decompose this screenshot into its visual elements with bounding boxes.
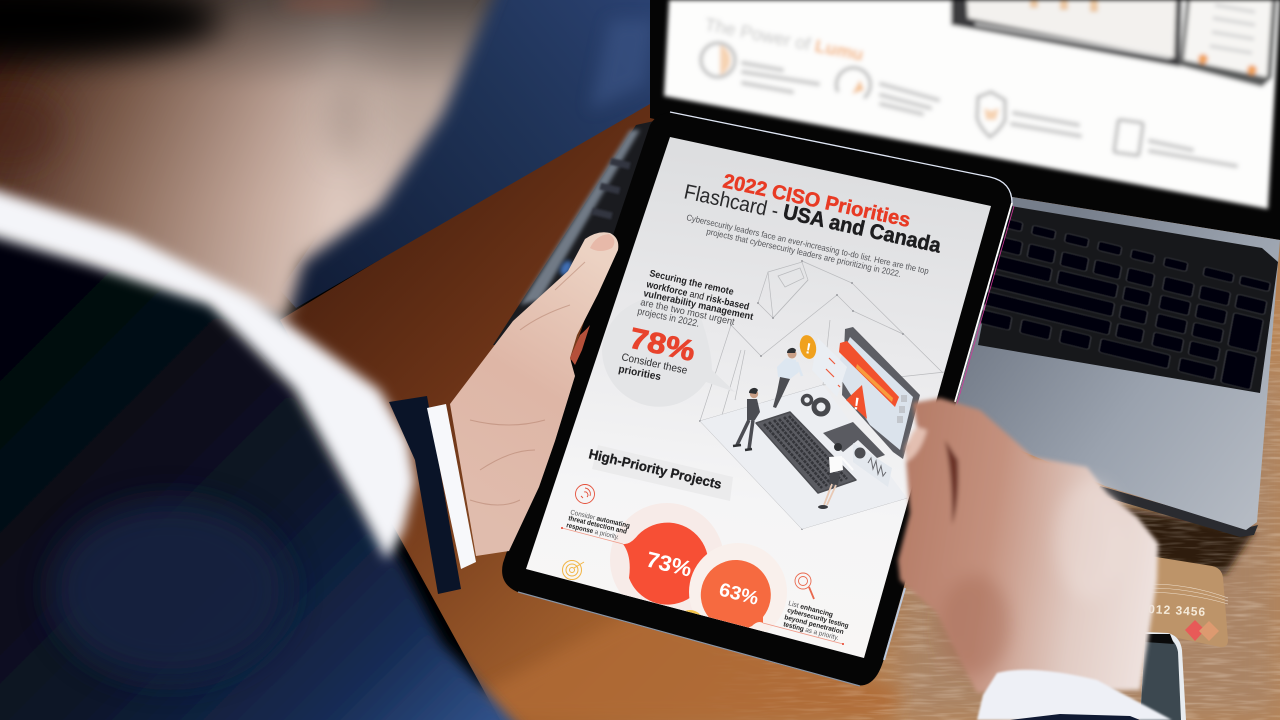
wireframe room behind illustration bbox=[700, 261, 945, 529]
grey bubble behind 78% bbox=[604, 358, 734, 406]
key finding paragraph: are the two most urgent bbox=[639, 297, 736, 328]
key finding paragraph: Securing the remote bbox=[648, 268, 735, 298]
automating text and leader line: threat detection and bbox=[568, 515, 628, 536]
icon: warning triangle bbox=[846, 385, 867, 419]
wooden table background bbox=[280, 90, 1280, 720]
isometric security illustration bbox=[733, 327, 920, 509]
infographic content on tablet bbox=[561, 170, 945, 645]
automating text and leader line: response a priority. bbox=[566, 522, 620, 541]
icon: warning triangle: ! bbox=[852, 394, 861, 414]
credit card bbox=[1148, 556, 1228, 647]
intro paragraph: Cybersecurity leaders face an ever-increasing to-do list. Here are the top bbox=[686, 212, 930, 276]
blue sofa behind the man bbox=[280, 0, 662, 308]
jacket sleeve at bottom right bbox=[1010, 714, 1140, 720]
key finding paragraph bbox=[636, 268, 755, 330]
icon: gears bbox=[802, 396, 828, 414]
63% bubble: 63% bbox=[717, 580, 761, 610]
enhancing text and leader line: cybersecurity testing bbox=[786, 607, 849, 630]
automating text and leader line bbox=[561, 509, 631, 544]
illustration floor plate bbox=[700, 385, 907, 529]
standing man in light shirt bbox=[773, 348, 802, 408]
subtitle flashcard: Flashcard - bbox=[682, 180, 781, 223]
key finding paragraph: workforce and risk-based bbox=[644, 279, 750, 313]
tablet screen bbox=[526, 137, 991, 658]
card number: 012 3456 bbox=[1148, 602, 1207, 619]
laptop screen: blurred slide bbox=[664, 0, 1280, 209]
section heading high-priority projects: High-Priority Projects bbox=[587, 446, 723, 492]
woman at keyboard bbox=[818, 443, 853, 509]
icon: magnifier bbox=[795, 573, 814, 599]
enhancing text and leader line: List enhancing bbox=[787, 600, 834, 619]
enhancing text and leader line bbox=[763, 600, 849, 645]
78% stat: Consider these bbox=[620, 351, 689, 377]
icon: fingerprint bbox=[576, 484, 594, 504]
tablet edge highlights bbox=[518, 112, 1014, 686]
key finding paragraph: projects in 2022. bbox=[636, 306, 700, 330]
icon: keyboard bbox=[756, 412, 856, 493]
73% bubble bbox=[610, 503, 724, 617]
left hand with thumb over tablet bbox=[450, 232, 618, 556]
enhancing text and leader line: testing as a priority. bbox=[783, 621, 840, 642]
icon: gold target bbox=[562, 560, 584, 580]
smartphone on table bbox=[1140, 632, 1186, 720]
subtitle flashcard: USA and Canada bbox=[781, 200, 943, 258]
jacket sleeve bbox=[389, 396, 461, 594]
78% stat: priorities bbox=[617, 363, 662, 383]
78% stat bbox=[618, 327, 694, 380]
tablet body bbox=[502, 112, 1014, 686]
icon: gold alert coin: ! bbox=[804, 340, 812, 358]
laptop icons and captions bbox=[701, 43, 1143, 156]
white shirt cuff bbox=[427, 404, 476, 569]
man: neck and head, blurred bbox=[0, 0, 505, 320]
standing man in dark suit bbox=[733, 388, 760, 450]
audio waveform panel bbox=[853, 443, 892, 487]
title: 2022 CISO Priorities bbox=[721, 170, 912, 232]
card logo bbox=[1185, 620, 1219, 641]
key finding paragraph: vulnerability management bbox=[642, 288, 755, 323]
laptop lid and display bbox=[650, 0, 1280, 240]
man: white shirt collar bbox=[0, 185, 415, 560]
laptop keyboard bbox=[978, 205, 1278, 393]
right hand holding tablet, blurred bbox=[898, 398, 1158, 693]
right shirt cuff bbox=[977, 670, 1172, 720]
icon: gold alert coin bbox=[800, 335, 816, 359]
partial gold circle at bottom bbox=[685, 610, 700, 615]
laptop base: left edge bbox=[493, 118, 668, 345]
laptop heading: The Power of Lumu bbox=[703, 14, 865, 65]
automating text and leader line: Consider automating bbox=[570, 509, 631, 530]
intro paragraph: projects that cybersecurity leaders are prioritizing in 2022. bbox=[706, 226, 902, 279]
laptop base: palm rest bbox=[900, 195, 1280, 537]
78% stat: 78% bbox=[627, 323, 698, 368]
document panel bbox=[823, 346, 847, 388]
subtitle flashcard bbox=[684, 184, 940, 253]
73% bubble: 73% bbox=[644, 547, 694, 582]
icon: monitor bbox=[823, 327, 920, 459]
63% bubble bbox=[689, 543, 787, 641]
enhancing text and leader line: beyond penetration bbox=[784, 614, 844, 636]
man: navy suit jacket bbox=[0, 225, 530, 720]
